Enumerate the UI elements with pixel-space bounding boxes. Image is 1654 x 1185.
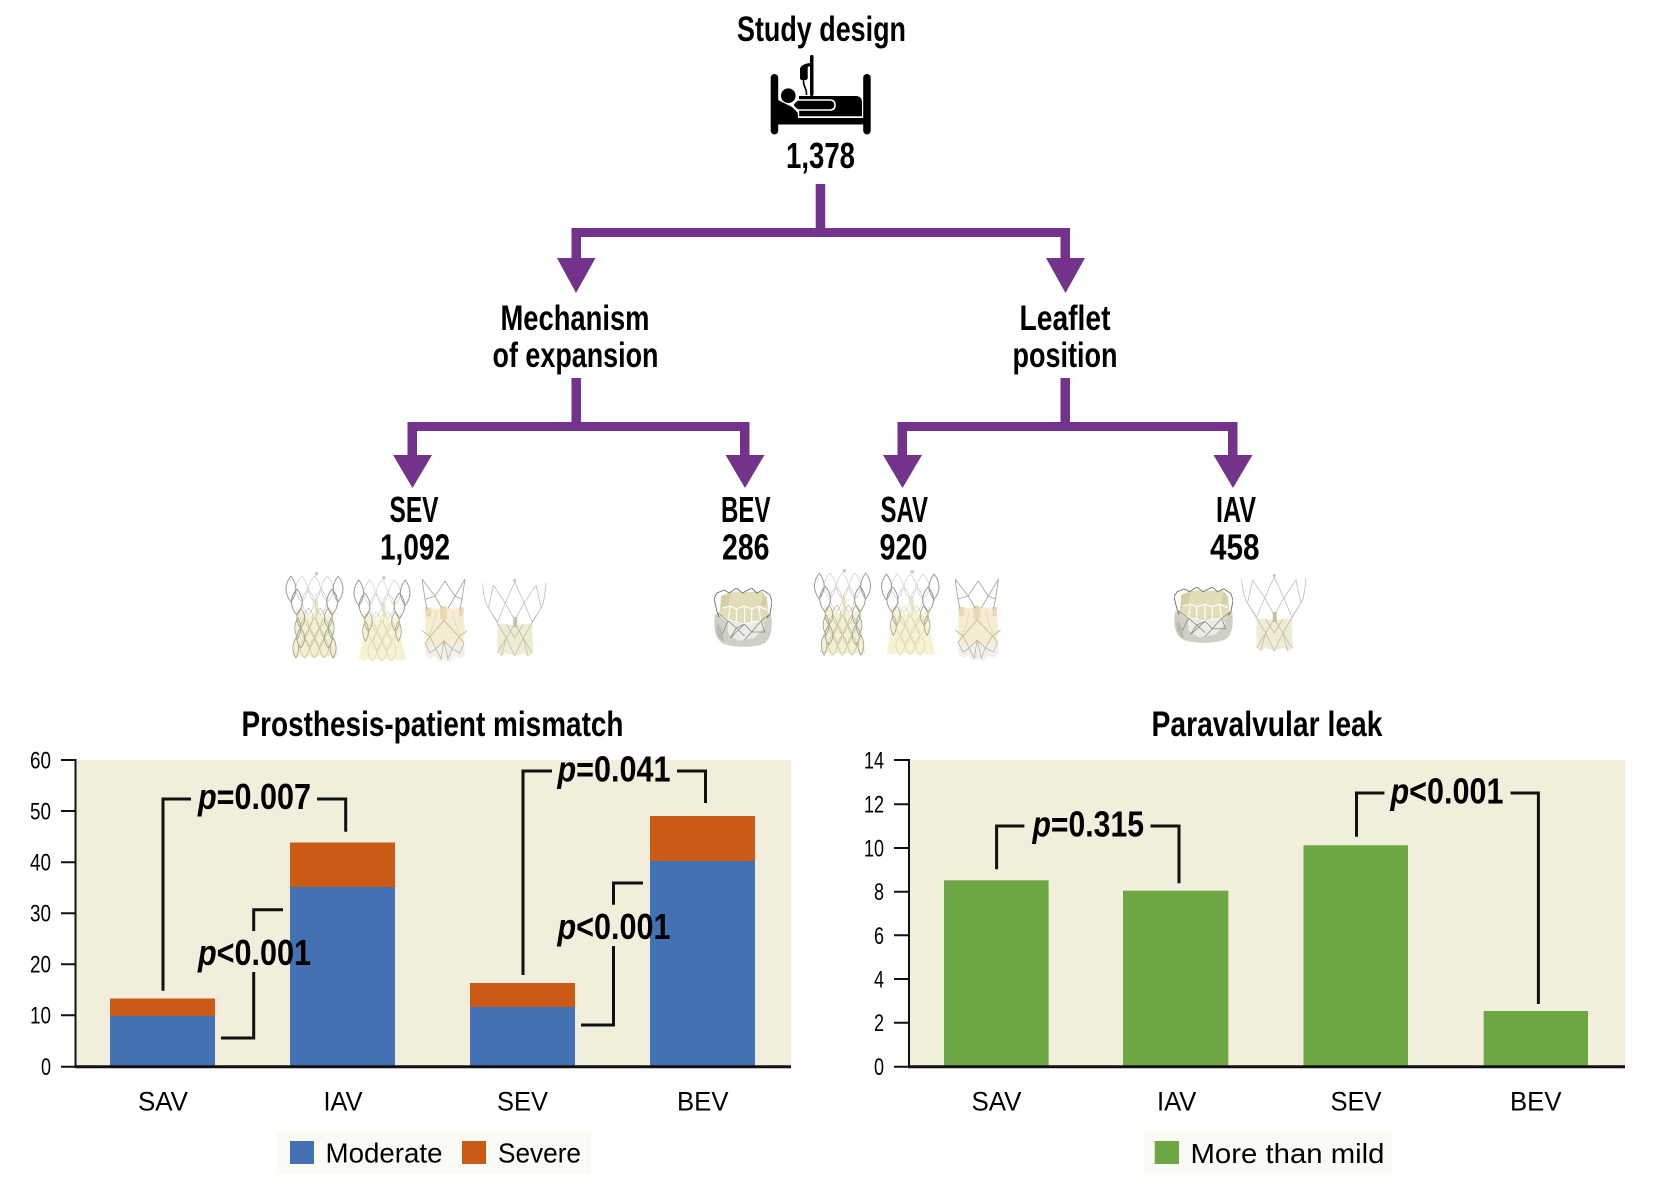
x-axis labels bbox=[972, 1086, 1562, 1116]
label: SEV 1,092: 1,092 bbox=[380, 526, 450, 568]
legend: Severe bbox=[498, 1138, 581, 1169]
y-axis labels: 20 bbox=[30, 952, 51, 978]
green bars bbox=[944, 845, 1588, 1067]
heading: Leaflet position: Leaflet bbox=[1020, 299, 1111, 338]
heading: Mechanism of expansion: Mechanism bbox=[500, 299, 650, 338]
y-axis labels bbox=[30, 748, 51, 1081]
chart title: Prosthesis-patient mismatch bbox=[242, 705, 624, 744]
p-values: p<0.001 bbox=[1390, 770, 1504, 811]
title: Study design: Study design bbox=[737, 10, 906, 49]
x-axis labels: IAV bbox=[324, 1086, 362, 1116]
axes and ticks bbox=[894, 759, 909, 1067]
icons: self-expanding valves bbox=[286, 572, 546, 662]
heading: Leaflet position bbox=[1012, 299, 1118, 375]
y-axis labels: 50 bbox=[30, 798, 51, 826]
p-values: p<0.001 bbox=[197, 932, 311, 973]
arrow: mechanism branches to SEV and BEV bbox=[393, 378, 764, 488]
y-axis labels: 0 bbox=[41, 1054, 51, 1081]
y-axis labels: 6 bbox=[874, 923, 884, 950]
x-axis labels: BEV bbox=[677, 1086, 728, 1116]
x-axis labels: SEV bbox=[1330, 1086, 1382, 1116]
heading: Mechanism of expansion bbox=[492, 299, 658, 375]
y-axis labels: 10 bbox=[864, 836, 884, 862]
legend: More than mild bbox=[1190, 1138, 1384, 1169]
label: BEV 286: BEV bbox=[721, 489, 770, 530]
y-axis labels bbox=[864, 748, 884, 1081]
axes and ticks bbox=[61, 759, 76, 1067]
y-axis labels: 10 bbox=[30, 1002, 51, 1030]
arrow: top tree splitting to two study arms bbox=[557, 184, 1085, 293]
arrow: leaflet position branches to SAV and IAV bbox=[883, 378, 1252, 488]
label: SAV 920: SAV bbox=[880, 489, 928, 530]
total patient count: 1,378 bbox=[786, 135, 855, 176]
icons: intra-annular valves bbox=[1174, 574, 1306, 651]
label: IAV 458: 458 bbox=[1210, 526, 1260, 568]
label: IAV 458: IAV bbox=[1216, 489, 1256, 530]
label: BEV 286 bbox=[721, 489, 770, 568]
y-axis labels: 4 bbox=[874, 966, 884, 994]
label: SAV 920 bbox=[880, 489, 928, 568]
legend bbox=[277, 1131, 591, 1174]
label: IAV 458 bbox=[1210, 489, 1260, 568]
p-values: p=0.007 bbox=[197, 776, 311, 817]
y-axis labels: 14 bbox=[864, 748, 884, 774]
label: BEV 286: 286 bbox=[722, 526, 770, 568]
y-axis labels: 60 bbox=[30, 748, 51, 774]
x-axis labels: BEV bbox=[1510, 1086, 1562, 1116]
x-axis labels: SAV bbox=[972, 1086, 1022, 1116]
x-axis labels bbox=[138, 1086, 728, 1116]
legend: Moderate bbox=[326, 1138, 442, 1169]
stacked bars bbox=[110, 816, 755, 1066]
p-values: p=0.041 bbox=[557, 749, 670, 790]
y-axis labels: 2 bbox=[874, 1010, 884, 1037]
y-axis labels: 12 bbox=[864, 792, 884, 818]
heading: Leaflet position: position bbox=[1012, 336, 1118, 375]
plot background bbox=[75, 760, 791, 1067]
y-axis labels: 30 bbox=[30, 900, 51, 928]
chart title: Paravalvular leak bbox=[1152, 705, 1383, 744]
p-values bbox=[197, 749, 670, 973]
x-axis labels: SAV bbox=[138, 1086, 188, 1116]
label: SEV 1,092: SEV bbox=[390, 489, 438, 530]
y-axis labels: 8 bbox=[874, 879, 884, 906]
y-axis labels: 40 bbox=[30, 850, 51, 876]
label: SEV 1,092 bbox=[380, 489, 450, 568]
significance brackets bbox=[163, 771, 706, 1038]
icons: supra-annular valves bbox=[814, 569, 1000, 661]
label: SAV 920: 920 bbox=[880, 526, 928, 568]
p-values bbox=[1032, 770, 1504, 845]
icon: balloon-expandable valve bbox=[714, 588, 772, 647]
icon: patient in hospital bed with IV bbox=[771, 55, 871, 134]
plot background bbox=[908, 760, 1625, 1067]
significance brackets bbox=[997, 793, 1538, 1004]
legend bbox=[1144, 1131, 1392, 1175]
x-axis labels: SEV bbox=[497, 1086, 548, 1116]
p-values: p<0.001 bbox=[557, 906, 670, 947]
panel: paravalvular leak chart bbox=[864, 705, 1625, 1175]
heading: Mechanism of expansion: of expansion bbox=[492, 336, 658, 375]
panel: prosthesis-patient mismatch chart bbox=[30, 705, 791, 1174]
p-values: p=0.315 bbox=[1032, 804, 1144, 845]
y-axis labels: 0 bbox=[874, 1054, 884, 1081]
x-axis labels: IAV bbox=[1157, 1086, 1196, 1116]
